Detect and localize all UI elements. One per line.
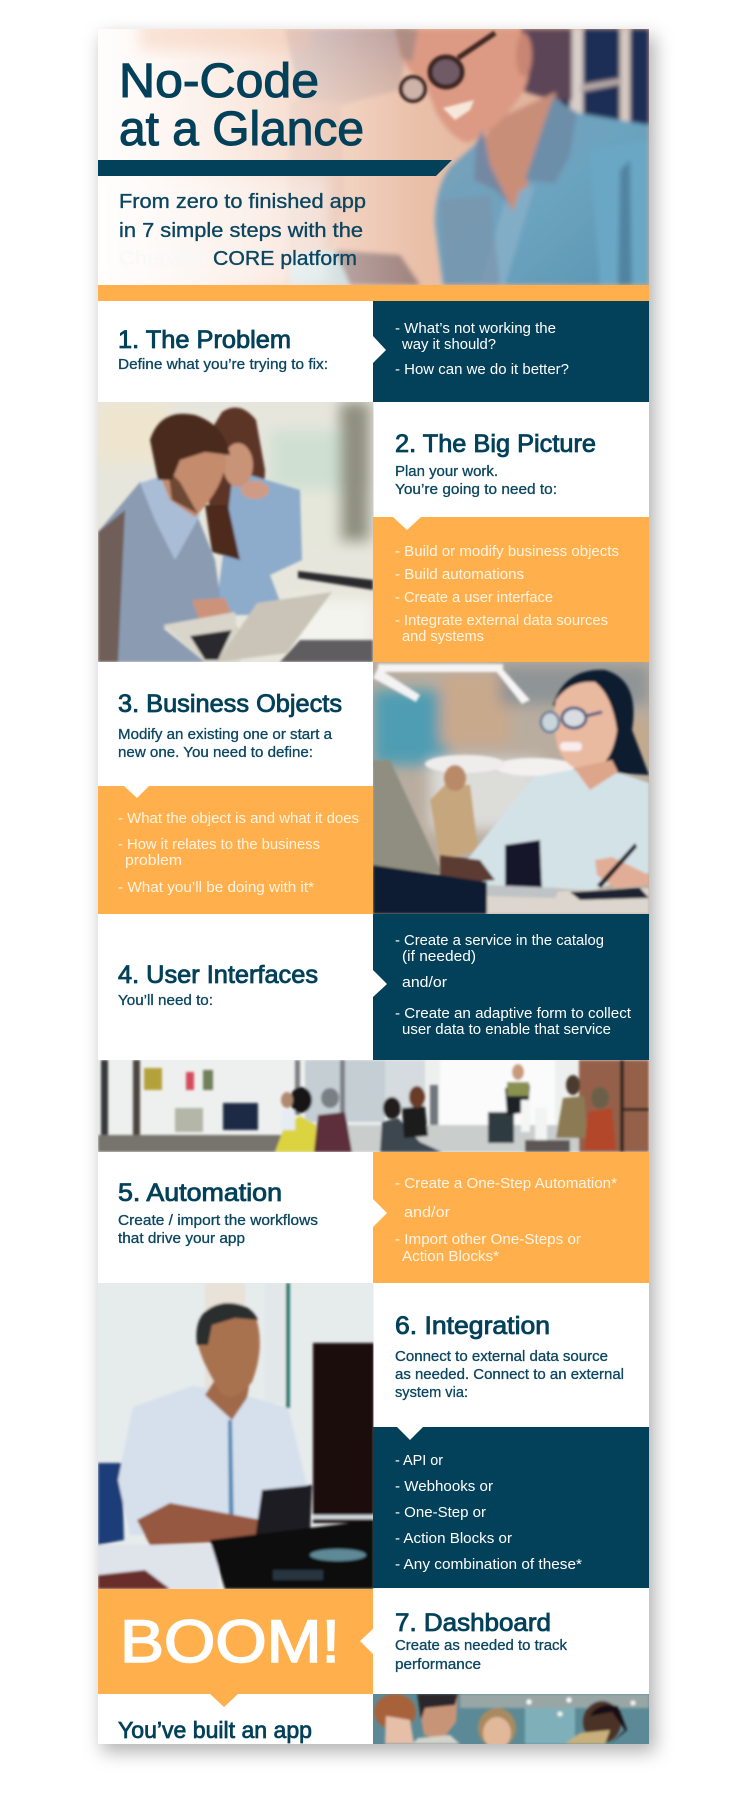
step 4 callout: and/or — [402, 975, 447, 991]
step 5 callout: - Import other One-Steps or — [395, 1232, 581, 1248]
step 4 callout: - Create a service in the catalog — [395, 933, 604, 949]
photo: woman at desk — [373, 662, 649, 914]
step 7 text: performance — [395, 1657, 481, 1673]
step 2 heading: 2. The Big Picture — [395, 430, 596, 458]
panel: step 6 — [373, 1312, 649, 1588]
closing heading: You’ve built an app — [118, 1717, 312, 1743]
step 3 text: new one. You need to define: — [118, 745, 313, 761]
boom text: BOOM! — [120, 1608, 340, 1675]
step 5 callout: Action Blocks* — [402, 1249, 499, 1265]
step 3 list: problem — [125, 853, 182, 869]
step 3 list — [98, 786, 373, 914]
photo: team meeting banner — [98, 1060, 649, 1152]
step 1 callout: - What’s not working the — [395, 321, 556, 337]
hero photo: woman with glasses — [98, 20, 649, 285]
photo: couple at laptop — [98, 402, 374, 662]
photo: team smiling — [373, 1694, 649, 1749]
panel: step 3 — [98, 690, 373, 914]
hero subtitle: CORE platform — [213, 247, 357, 270]
step 2 text: Plan your work. — [395, 464, 498, 480]
step 6 list: - Action Blocks or — [395, 1531, 512, 1547]
step 2 list: - Integrate external data sources — [395, 613, 608, 629]
step 4 callout: user data to enable that service — [402, 1022, 611, 1038]
step 6 list: - API or — [395, 1453, 443, 1469]
step 6 list: - Webhooks or — [395, 1479, 493, 1495]
hero title: No-Code — [119, 55, 319, 108]
hero title: at a Glance — [119, 103, 364, 156]
step 6 text — [395, 1349, 624, 1401]
step 5 text: that drive your app — [118, 1231, 245, 1247]
step 4 callout: - Create an adaptive form to collect — [395, 1006, 631, 1022]
step 7 heading: 7. Dashboard — [395, 1609, 551, 1637]
step 5 callout — [373, 1152, 649, 1283]
step 1 callout — [373, 301, 649, 402]
step 5 text: Create / import the workflows — [118, 1213, 318, 1229]
step 5 text — [118, 1213, 318, 1247]
step 4 text: You’ll need to: — [118, 993, 213, 1009]
step 4 heading: 4. User Interfaces — [118, 961, 318, 989]
step 7 text: Create as needed to track — [395, 1638, 568, 1654]
step 5 callout: - Create a One-Step Automation* — [395, 1176, 617, 1192]
panel: step 4 — [118, 914, 649, 1060]
card base — [98, 29, 649, 1744]
step 2 text — [395, 464, 557, 498]
orange band — [98, 285, 649, 301]
step 5 heading: 5. Automation — [118, 1179, 282, 1207]
step 6 text: Connect to external data source — [395, 1349, 608, 1365]
step 2 list: - Build or modify business objects — [395, 544, 619, 560]
hero title — [119, 55, 364, 156]
step 6 heading: 6. Integration — [395, 1312, 550, 1340]
hero subtitle: in 7 simple steps with the — [119, 219, 363, 242]
step 1 heading: 1. The Problem — [118, 326, 291, 354]
panel: step 2 — [373, 430, 649, 662]
step 2 list: - Build automations — [395, 567, 524, 583]
panel: boom — [98, 1589, 373, 1707]
step 3 text: Modify an existing one or start a — [118, 727, 333, 743]
hero subtitle: Cherwell — [119, 247, 205, 270]
infographic — [91, 25, 666, 1763]
step 6 text: as needed. Connect to an external — [395, 1367, 624, 1383]
hero subtitle: From zero to finished app — [119, 190, 366, 213]
hero rule — [98, 160, 452, 176]
panel: hero — [98, 20, 649, 285]
step 1 callout: - How can we do it better? — [395, 362, 569, 378]
step 1 callout: way it should? — [401, 337, 496, 353]
step 2 text: You’re going to need to: — [395, 482, 557, 498]
step 3 text — [118, 727, 333, 761]
step 6 list — [373, 1427, 649, 1588]
panel: step 5 — [118, 1152, 649, 1283]
step 6 list: - One-Step or — [395, 1505, 486, 1521]
step 3 list: - What the object is and what it does — [118, 811, 359, 827]
step 1 text: Define what you’re trying to fix: — [118, 357, 328, 373]
step 7 text — [395, 1638, 568, 1673]
card shadow — [102, 36, 655, 1752]
step 2 list: and systems — [402, 629, 484, 645]
photo: man at computer — [98, 1283, 374, 1589]
hero subtitle — [119, 190, 366, 270]
step 3 heading: 3. Business Objects — [118, 690, 342, 718]
step 3 list: - How it relates to the business — [118, 837, 320, 853]
step 4 callout: (if needed) — [402, 949, 476, 965]
step 4 callout — [373, 914, 649, 1060]
panel: step 1 — [118, 301, 649, 402]
step 2 list — [373, 517, 649, 662]
step 6 text: system via: — [395, 1385, 468, 1401]
step 6 list: - Any combination of these* — [395, 1557, 582, 1573]
step 2 list: - Create a user interface — [395, 590, 553, 606]
panel: step 7 — [395, 1609, 568, 1673]
step 3 list: - What you’ll be doing with it* — [118, 880, 314, 896]
boom background — [98, 1589, 373, 1707]
step 5 callout: and/or — [404, 1205, 450, 1221]
